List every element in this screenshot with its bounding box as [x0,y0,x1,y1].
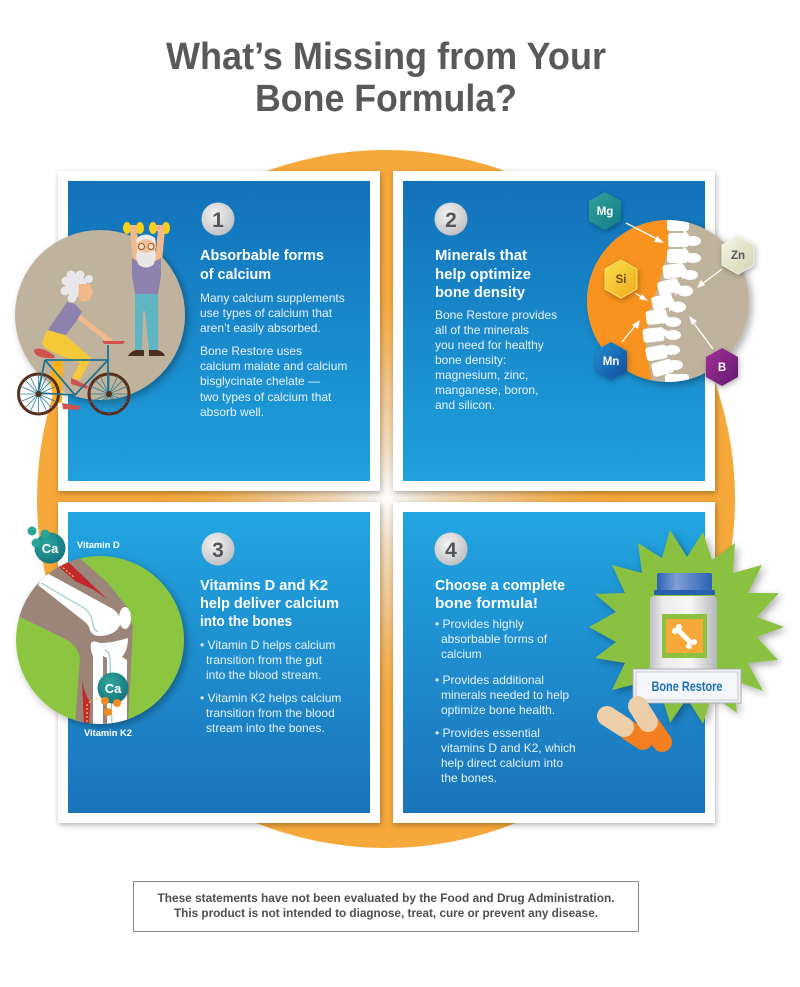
hexagon Mn: Mn [603,356,619,368]
text 4: optimize bone health. [441,703,555,717]
spine [642,218,701,386]
text 4 [435,617,576,785]
bone icon [672,624,697,649]
heading 1: of calcium [200,267,271,283]
number badge 3: 3 [212,539,224,562]
text 3: • Vitamin K2 helps calcium [200,691,341,705]
text 4: • Provides essential [435,726,540,740]
text 2: you need for healthy [435,338,544,352]
center glow [147,257,627,737]
disclaimer box: These statements have not been evaluated by the Food and Drug Administration. [158,893,614,905]
title: What’s Missing from Your [166,36,606,78]
disclaimer box [134,882,638,932]
heading 1: Absorbable forms [200,248,324,264]
heading 4: bone formula! [435,596,538,612]
text 1: absorb well. [200,405,264,419]
text 2: manganese, boron, [435,383,538,397]
heading 3: help deliver calcium [200,596,339,612]
mineral hexagons [589,192,754,386]
hexagon B: B [718,362,726,374]
arteries [58,559,107,599]
product label [633,669,741,703]
orange background circle [37,150,735,848]
panel 4: complete formula [393,502,715,823]
text 1: two types of calcium that [200,390,332,404]
bones [38,572,120,636]
heading 3 [200,578,339,630]
number badge 2 [434,202,468,236]
heading 4: Choose a complete [435,578,565,594]
hexagon Si: Si [616,274,626,286]
vitamin K2 label: Vitamin K2 [84,728,132,738]
product label: Bone Restore [652,678,723,694]
man lifting dumbbells [123,222,170,356]
text 4: absorbable forms of [441,632,548,646]
calcium bottom [98,672,128,716]
capsules [607,706,662,742]
panel 2: minerals [393,171,715,491]
text 1: aren’t easily absorbed. [200,321,321,335]
green starburst [589,530,784,724]
text 4: help direct calcium into [441,756,563,770]
heading 4 [435,578,565,612]
text 2: and silicon. [435,398,495,412]
text 1: Many calcium supplements [200,291,345,305]
illustration: knee with calcium [10,526,184,738]
text 4: calcium [441,647,482,661]
panel 3: vitamins [58,502,380,823]
text 4: the bones. [441,771,497,785]
text 1: Bone Restore uses [200,344,302,358]
hexagon Mg: Mg [597,206,613,218]
number badge 1 [202,202,234,236]
arrows to spine [622,223,722,349]
calcium top: Ca [42,541,59,556]
number badge 4: 4 [445,539,457,562]
hexagon Mn [595,342,627,380]
heading 2: bone density [435,285,526,301]
illustration: seniors exercising [15,222,185,414]
calcium top [28,526,66,564]
text 3: stream into the bones. [206,721,325,735]
text 1 [200,291,347,419]
number badge 1: 1 [212,209,224,232]
heading 3: Vitamins D and K2 [200,578,328,594]
text 3: transition from the blood [206,706,335,720]
heading 1 [200,248,324,283]
title: Bone Formula? [255,78,517,120]
text 3 [200,638,341,735]
illustration: Bone Restore bottle [589,530,784,742]
text 3: into the blood stream. [206,668,321,682]
panel 1: absorbable calcium [58,171,380,491]
heading 2 [435,248,531,301]
text 1: calcium malate and calcium [200,359,347,373]
hexagon Zn: Zn [731,250,745,262]
text 2: bone density: [435,353,506,367]
hexagon B [706,348,738,386]
calcium bottom: Ca [105,681,122,696]
title [166,36,606,120]
text 2: all of the minerals [435,323,529,337]
text 4: vitamins D and K2, which [441,741,576,755]
text 1: bisglycinate chelate — [200,374,320,388]
heading 2: Minerals that [435,248,527,264]
hexagon Si [605,260,637,298]
hexagon Zn [722,236,754,274]
text 2 [435,308,557,412]
text 1: use types of calcium that [200,306,333,320]
disclaimer box: This product is not intended to diagnose, treat, cure or prevent any disease. [174,908,598,920]
woman on bicycle [18,270,129,414]
text 3: transition from the gut [206,653,323,667]
number badge 4 [434,532,468,566]
vitamin D label: Vitamin D [77,540,120,550]
text 4: minerals needed to help [441,688,569,702]
text 2: Bone Restore provides [435,308,557,322]
bottle [650,573,717,672]
text 3: • Vitamin D helps calcium [200,638,335,652]
heading 2: help optimize [435,267,531,283]
illustration: spine with minerals [587,192,754,386]
hexagon Mg [589,192,621,230]
heading 3: into the bones [200,614,292,630]
number badge 3 [202,532,234,566]
text 4: • Provides additional [435,673,544,687]
text 4: • Provides highly [435,617,524,631]
number badge 2: 2 [445,209,457,232]
leg [20,558,133,724]
text 2: magnesium, zinc, [435,368,528,382]
